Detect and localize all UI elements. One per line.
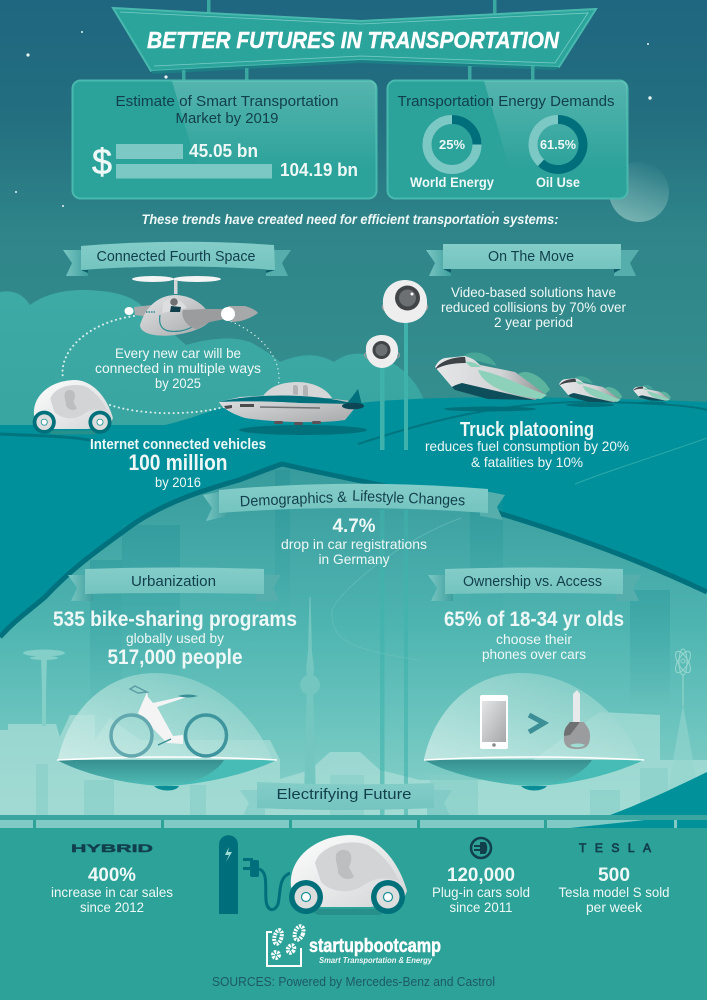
sources: SOURCES: Powered by Mercedes-Benz and Castrol: [212, 974, 495, 989]
mid-distance road bands: [0, 397, 707, 660]
title banner: [113, 8, 596, 74]
text: bike sharing: [53, 608, 297, 669]
text: internet connected vehicles: [90, 437, 266, 490]
ribbon text: On The Move: [488, 248, 574, 265]
donut value: 61.5%: 61.5%: [540, 137, 576, 152]
railing: [0, 815, 707, 828]
stat: plug-in cars: [432, 838, 530, 915]
title text: BETTER FUTURES IN TRANSPORTATION: [147, 27, 559, 53]
landmark: TV tower: [300, 597, 320, 800]
heading: energy demands: Transportation Energy Demands: [398, 94, 614, 110]
dome: bike: [57, 673, 277, 790]
faint swoosh line: [332, 518, 461, 660]
dome: phone and key: [424, 673, 644, 790]
caption second line: since 2011: [450, 899, 513, 915]
value: 45.05 bn: 45.05 bn: [189, 141, 258, 161]
text: connected in multiple ways: [95, 345, 261, 391]
text: video based solutions: reduced collisions by 70% over: [441, 299, 626, 315]
donut: oil use 61.5%: [533, 119, 583, 170]
stat: hybrid: [51, 843, 173, 915]
city skyline backdrop: [90, 470, 670, 720]
intro sentence: These trends have created need for efficient transportation systems:: [142, 211, 558, 227]
icon: charging station: [219, 835, 290, 914]
icon: small truck: [633, 385, 671, 401]
camera poles: [380, 322, 408, 820]
text: video based solutions: [441, 284, 626, 330]
flight path dots: [62, 316, 279, 413]
label: world energy: World Energy: [410, 174, 494, 190]
value: 500: 500: [598, 865, 630, 886]
stat: tesla: [558, 841, 670, 915]
text: car registrations: drop in car registrations: [281, 536, 427, 552]
icon: flying plane: [219, 382, 367, 435]
icon: large truck: [435, 353, 550, 400]
hybrid logo: HYBRID: [71, 843, 153, 855]
ribbon: electrifying future: [240, 782, 452, 816]
ribbon text: Connected Fourth Space: [96, 248, 256, 265]
tagline: Smart Transportation & Energy: [319, 955, 433, 965]
text: bike sharing: 535 bike-sharing programs: [53, 608, 297, 631]
text: bike sharing: globally used by: [126, 630, 224, 646]
donut value: 25%: 25%: [439, 137, 465, 152]
icon: car key: [564, 690, 590, 749]
bar: 104.19 bn: [116, 164, 272, 178]
label: oil use: Oil Use: [536, 174, 580, 190]
text: truck platooning: [425, 419, 629, 470]
icon: greater-than arrow: [529, 715, 544, 732]
ribbon text: Electrifying Future: [276, 786, 412, 803]
dollar sign: $: [92, 141, 112, 182]
text: truck platooning: & fatalities by 10%: [471, 454, 583, 470]
icon: electric car: [289, 835, 407, 915]
background hills: [0, 290, 424, 440]
text: connected in multiple ways: connected in multiple ways: [95, 360, 261, 376]
value: 104.19 bn: 104.19 bn: [280, 160, 358, 180]
text: truck platooning: reduces fuel consumption by 20%: [425, 438, 629, 454]
ribbon text left: Demographics &: [239, 489, 347, 510]
dark corner road: [610, 772, 707, 815]
icon: bike: [111, 686, 226, 756]
landmark: atom antenna: [668, 649, 698, 790]
caption: Plug-in cars sold: [432, 884, 530, 900]
icon: pod car: [33, 380, 113, 434]
ribbon: ownership: [428, 568, 641, 601]
text: connected in multiple ways: Every new car will be: [115, 345, 241, 361]
donut: world energy 25%: [427, 120, 477, 170]
central lower background: [0, 464, 707, 830]
heading: market second line: Market by 2019: [176, 111, 278, 127]
road edge lines: [0, 402, 707, 484]
caption: increase in car sales: [51, 884, 173, 900]
text: bike sharing: 517,000 people: [108, 646, 242, 669]
ribbon text right: Lifestyle Changes: [352, 488, 466, 509]
text: internet connected vehicles: Internet connected vehicles: [90, 437, 266, 453]
bar: 45.05 bn: [116, 144, 183, 159]
text: phones over cars: 65% of 18-34 yr olds: [444, 608, 624, 631]
stars: [15, 31, 652, 213]
heading: market: Estimate of Smart Transportation: [116, 94, 338, 110]
icon: small camera: [364, 335, 400, 368]
tesla logo: TESLA: [579, 841, 651, 855]
text: video based solutions: 2 year period: [494, 314, 573, 330]
panel: energy demands: [388, 80, 628, 198]
caption: Tesla model S sold: [558, 884, 670, 900]
text: car registrations: 4.7%: [332, 516, 376, 537]
ribbon: connected fourth space: [63, 242, 291, 276]
icon: plug: [471, 838, 491, 858]
ropes to panels: [182, 66, 534, 81]
truck shadows: [444, 402, 666, 412]
text: phones over cars: [444, 608, 624, 662]
ribbon text: Ownership vs. Access: [463, 573, 602, 590]
panel: electrifying future: [0, 828, 707, 1000]
icon: phone: [480, 695, 508, 749]
logo: startupbootcamp: [267, 925, 441, 966]
text: phones over cars: phones over cars: [482, 646, 586, 662]
sky background: [0, 0, 707, 470]
caption second line: since 2012: [80, 899, 144, 915]
ribbon text: Urbanization: [131, 573, 216, 590]
text: connected in multiple ways: by 2025: [155, 375, 201, 391]
stat: 100 million: 100 million: [128, 450, 228, 475]
ribbon: on the move: [426, 244, 639, 276]
value: 400%: 400%: [88, 865, 136, 886]
value: 120,000: 120,000: [447, 865, 515, 886]
icon: flying helicopter car: [124, 276, 258, 336]
text: video based solutions: Video-based solutions have: [451, 284, 616, 300]
by 2016: by 2016: [155, 474, 201, 490]
panel: smart transportation market: [72, 80, 376, 198]
caption second line: per week: [586, 899, 643, 915]
text: car registrations: [281, 516, 427, 567]
wordmark: startupbootcamp: [309, 936, 441, 957]
icon: large camera: [382, 280, 428, 323]
text: truck platooning: Truck platooning: [460, 419, 594, 441]
ribbon: urbanization: [68, 568, 281, 601]
landmark: space needle: [23, 650, 65, 726]
hanging ropes for title: [207, 0, 496, 14]
icon: medium truck: [559, 376, 622, 402]
ribbon: demographics: [203, 484, 505, 521]
text: phones over cars: choose their: [496, 631, 572, 647]
moon: [609, 162, 669, 222]
arc stroke around central area: [0, 464, 707, 637]
text: car registrations: in Germany: [318, 551, 390, 567]
